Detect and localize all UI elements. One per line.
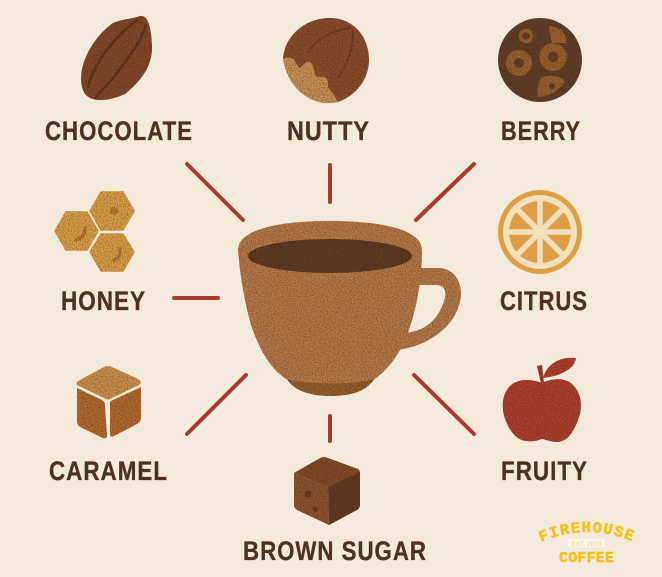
icon: honeycomb (55, 192, 134, 271)
label: nutty: NUTTY (287, 116, 370, 146)
label: caramel: CARAMEL (49, 456, 168, 486)
label: brown sugar: BROWN SUGAR (243, 536, 427, 566)
icon: brown sugar cube (294, 457, 360, 525)
label: fruity: FRUITY (501, 456, 588, 486)
icon: apple (503, 358, 581, 442)
icon: berry (498, 18, 582, 102)
icon: cacao bean (81, 16, 152, 100)
icon: hazelnut (283, 18, 369, 103)
logo: firehouse coffee: EST. 2019 (572, 541, 602, 548)
icon: caramel cube (77, 366, 141, 438)
label: chocolate: CHOCOLATE (45, 116, 193, 146)
label: honey: HONEY (61, 286, 146, 316)
logo: firehouse coffee: COFFEE (559, 550, 614, 567)
icon: coffee cup (238, 221, 461, 396)
logo: firehouse coffee (538, 522, 635, 567)
label: citrus: CITRUS (500, 286, 588, 316)
icon: citrus slice (498, 190, 582, 274)
radiating lines (174, 164, 474, 441)
label: berry: BERRY (501, 116, 581, 146)
logo: firehouse coffee: FIREHOUSE (538, 522, 635, 542)
